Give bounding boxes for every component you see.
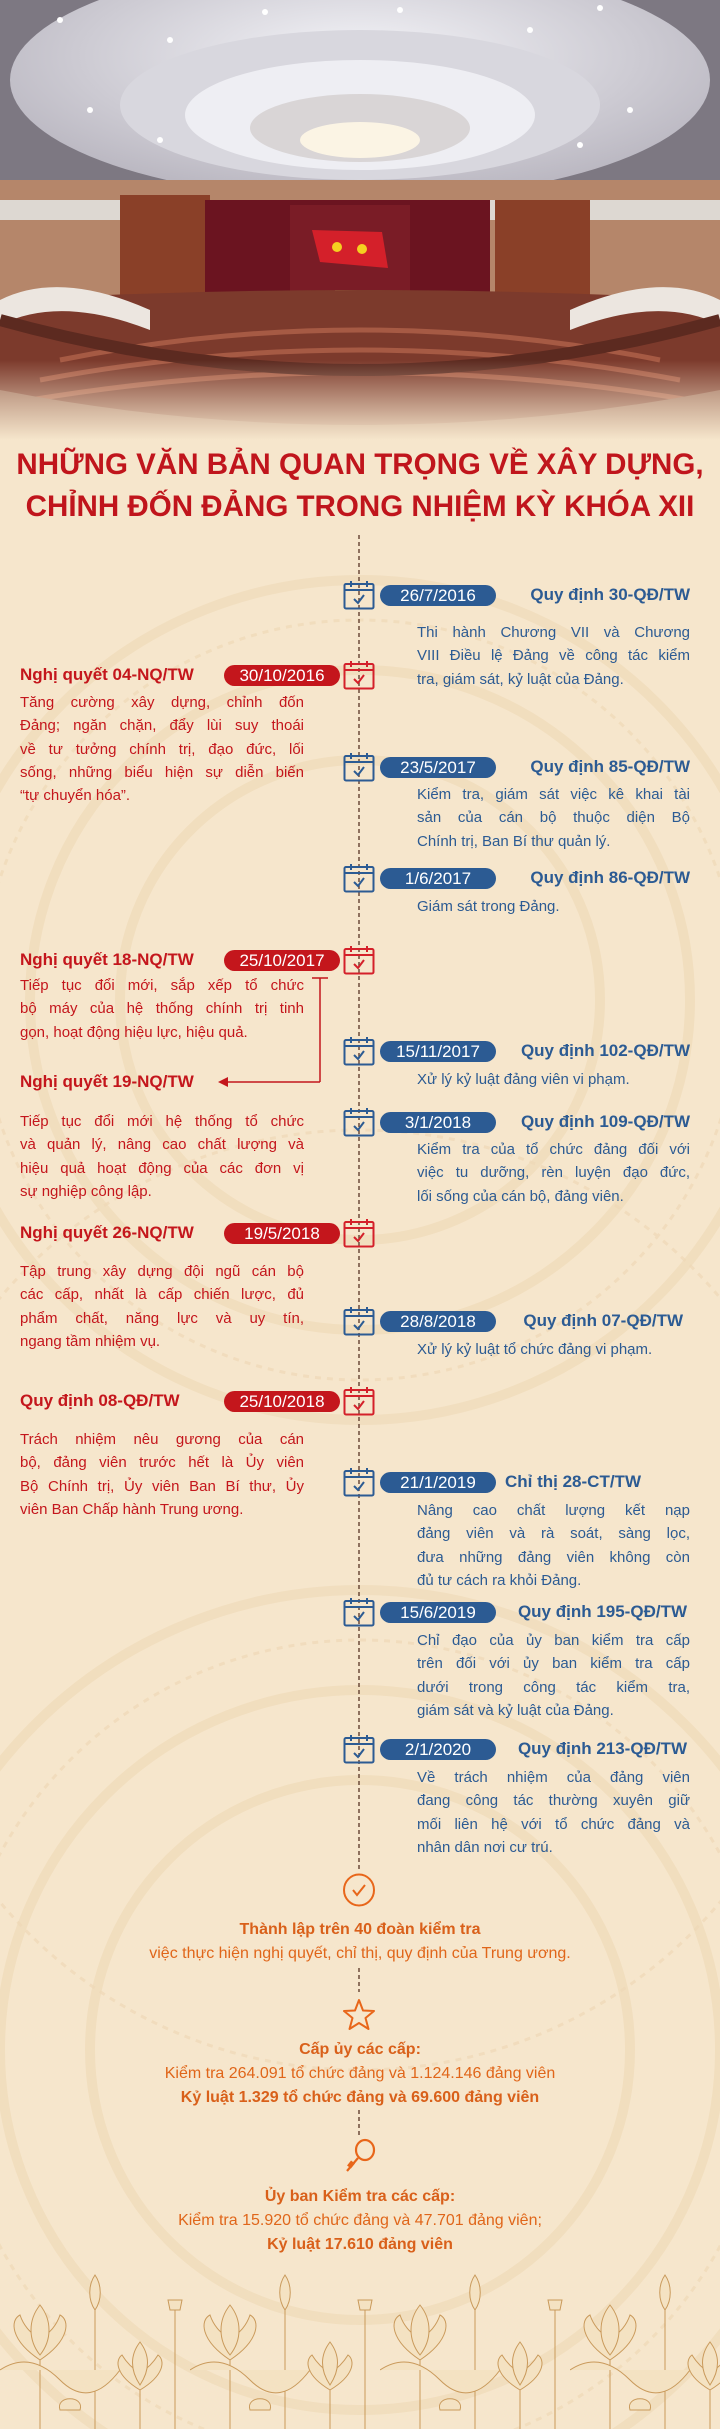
text block: bộ máy của hệ thống chính trị tinh xyxy=(20,1000,304,1017)
pill date xyxy=(380,1602,496,1623)
text block: Bộ Chính trị, Ủy viên Ban Bí thư, Ủy xyxy=(20,1478,304,1495)
callout: inspection teams: việc thực hiện nghị quyết, chỉ thị, quy định của Trung ương. xyxy=(149,1945,571,1962)
pill date red: 19/5/2018 xyxy=(244,1224,320,1243)
icon: calendar red xyxy=(344,946,374,974)
callout: inspection teams xyxy=(149,1921,571,1962)
text block: Tiếp tục đổi mới, sắp xếp tổ chức xyxy=(20,977,304,994)
pill date red: 30/10/2016 xyxy=(239,666,325,685)
text block xyxy=(417,1502,690,1589)
text block: NQ19: Tiếp tục đổi mới hệ thống tổ chức xyxy=(20,1113,304,1130)
text block: NQ19 xyxy=(20,1113,304,1200)
text block: Nâng cao chất lượng kết nạp xyxy=(417,1502,690,1519)
entry: Nghị quyết 26: Nghị quyết 26-NQ/TW xyxy=(20,1223,194,1242)
text block: việc tu dưỡng, rèn luyện đạo đức, xyxy=(417,1164,690,1181)
text block: Xử lý kỷ luật đảng viên vi phạm. xyxy=(417,1071,630,1088)
pill date red: 25/10/2018 xyxy=(239,1392,325,1411)
text block xyxy=(20,977,304,1041)
heading: Quy định 07-QĐ/TW xyxy=(523,1311,683,1330)
text block: về tư tưởng chính trị, đạo đức, lối xyxy=(20,741,304,758)
text block: đủ tư cách ra khỏi Đảng. xyxy=(417,1572,581,1589)
text block: các cấp, nhất là cấp chiến lược, đủ xyxy=(20,1286,304,1303)
pill date xyxy=(380,1112,496,1133)
pill date: 28/8/2018 xyxy=(400,1312,476,1331)
pill date: 21/1/2019 xyxy=(400,1473,476,1492)
arrow: bracket 18 to 19 xyxy=(218,977,328,1087)
heading: Quy định 195-QĐ/TW xyxy=(518,1602,687,1621)
pill date red xyxy=(224,950,340,971)
entry: Nghị quyết 18: Nghị quyết 18-NQ/TW xyxy=(20,950,194,969)
entry: 26/7/2016 Quy định 30 xyxy=(344,581,374,610)
pill date red: 25/10/2017 xyxy=(239,951,325,970)
callout: party committees: Kiểm tra 264.091 tổ chức đảng và 1.124.146 đảng viên xyxy=(165,2065,555,2082)
icon: calendar red xyxy=(344,1219,374,1248)
text block: sản của cán bộ thuộc diện Bộ xyxy=(417,809,690,826)
text block: NQ19: hiệu quả hoạt động của các đơn vị xyxy=(20,1160,304,1177)
pill date red xyxy=(224,665,340,686)
icon: calendar red xyxy=(344,1387,374,1416)
text block: đang công tác thường xuyên giữ xyxy=(417,1792,690,1809)
text block: NQ19: sự nghiệp công lập. xyxy=(20,1183,152,1200)
text block: Kiểm tra, giám sát việc kê khai tài xyxy=(417,786,690,803)
entry: 23/5/2017 xyxy=(344,753,374,782)
heading: Quy định 109-QĐ/TW xyxy=(521,1112,690,1131)
text block: Kiểm tra của tổ chức đảng đối với xyxy=(417,1141,690,1158)
text block: NQ19: và quản lý, nâng cao chất lượng và xyxy=(20,1136,304,1153)
text block: Tập trung xây dựng đội ngũ cán bộ xyxy=(20,1263,304,1280)
pill date xyxy=(380,1472,496,1493)
pill date xyxy=(380,757,496,778)
callout: party committees: Cấp ủy các cấp: xyxy=(299,2041,421,2058)
text block: lối sống của cán bộ, đảng viên. xyxy=(417,1188,624,1205)
entry: 15/6/2019 xyxy=(344,1598,374,1626)
entry: Quy định 08: Quy định 08-QĐ/TW xyxy=(20,1391,180,1410)
title: NHỮNG VĂN BẢN QUAN TRỌNG VỀ XÂY DỰNG, xyxy=(16,448,704,481)
icon: calendar red xyxy=(344,661,374,690)
text block xyxy=(20,1431,304,1518)
icon: calendar blue xyxy=(344,581,374,610)
callout: inspection commissions xyxy=(178,2186,542,2253)
entry: Nghị quyết 04: Nghị quyết 04-NQ/TW xyxy=(20,665,194,684)
text block: đưa những đảng viên không còn xyxy=(417,1549,690,1566)
pill date: 23/5/2017 xyxy=(400,758,476,777)
callout: inspection commissions: Ủy ban Kiểm tra các cấp: xyxy=(265,2188,455,2205)
icon: star xyxy=(343,1999,375,2030)
title xyxy=(16,447,704,523)
text block xyxy=(417,1769,690,1856)
text block xyxy=(20,1263,304,1350)
text block: Đảng; ngăn chặn, đẩy lùi suy thoái xyxy=(20,717,304,734)
icon: check circle xyxy=(343,1874,375,1906)
heading: Nghị quyết 19: Nghị quyết 19-NQ/TW xyxy=(20,1072,194,1091)
text block: VIII Điều lệ Đảng về công tác kiểm xyxy=(417,647,690,664)
text block: “tự chuyển hóa”. xyxy=(20,787,130,804)
text block xyxy=(20,694,304,804)
text block: Chính trị, Ban Bí thư quản lý. xyxy=(417,833,610,850)
text block: viên Ban Chấp hành Trung ương. xyxy=(20,1501,243,1518)
text block xyxy=(417,624,690,688)
title: CHỈNH ĐỐN ĐẢNG TRONG NHIỆM KỲ KHÓA XII xyxy=(26,490,694,523)
entry: 21/1/2019 xyxy=(344,1468,374,1496)
text block: tra, giám sát, kỷ luật của Đảng. xyxy=(417,671,624,688)
entry: 15/11/2017 xyxy=(344,1037,374,1066)
text block: đảng viên và rà soát, sàng lọc, xyxy=(417,1525,690,1542)
text block: mối liên hệ với tổ chức đảng và xyxy=(417,1816,690,1833)
pill date: 2/1/2020 xyxy=(405,1740,471,1759)
pill date red xyxy=(224,1391,340,1412)
entry: 3/1/2018 xyxy=(344,1108,374,1136)
pill date: 26/7/2016 xyxy=(400,586,476,605)
text block: Chỉ đạo của ủy ban kiểm tra cấp xyxy=(417,1632,690,1649)
entry: 1/6/2017 xyxy=(344,864,374,892)
pill date: 3/1/2018 xyxy=(405,1113,471,1132)
heading: Quy định 86-QĐ/TW xyxy=(530,868,690,887)
text block: sống, những biểu hiện sự diễn biến xyxy=(20,764,304,781)
pill date red xyxy=(224,1223,340,1244)
heading: Chỉ thị 28-CT/TW xyxy=(505,1472,641,1491)
text block xyxy=(417,1632,690,1719)
entry: 2/1/2020 xyxy=(344,1735,374,1764)
pill date: 15/6/2019 xyxy=(400,1603,476,1622)
decorative lotus border xyxy=(0,2274,720,2429)
text block: Thi hành Chương VII và Chương xyxy=(417,624,690,641)
pill date xyxy=(380,1311,496,1332)
text block: trên đối với ủy ban kiểm tra cấp xyxy=(417,1655,690,1672)
callout: party committees: Kỷ luật 1.329 tổ chức đảng và 69.600 đảng viên xyxy=(181,2089,539,2106)
text block: gọn, hoạt động hiệu lực, hiệu quả. xyxy=(20,1024,248,1041)
text block: Về trách nhiệm của đảng viên xyxy=(417,1769,690,1786)
text block: giám sát và kỷ luật của Đảng. xyxy=(417,1702,614,1719)
text block: Trách nhiệm nêu gương của cán xyxy=(20,1431,304,1448)
pill date xyxy=(380,585,496,606)
callout: inspection commissions: Kiểm tra 15.920 tổ chức đảng và 47.701 đảng viên; xyxy=(178,2212,542,2229)
heading: Quy định 85-QĐ/TW xyxy=(530,757,690,776)
heading: Quy định 213-QĐ/TW xyxy=(518,1739,687,1758)
pill date xyxy=(380,1739,496,1760)
entry: 28/8/2018 xyxy=(344,1307,374,1336)
header photo: party congress hall xyxy=(0,0,720,434)
text block xyxy=(417,786,690,850)
text block: Xử lý kỷ luật tổ chức đảng vi phạm. xyxy=(417,1341,652,1358)
text block: nhân dân nơi cư trú. xyxy=(417,1839,553,1856)
pill date: 1/6/2017 xyxy=(405,869,471,888)
text block: Giám sát trong Đảng. xyxy=(417,898,560,915)
pill date xyxy=(380,868,496,889)
callout: party committees xyxy=(165,2041,555,2106)
icon: magnifier xyxy=(346,2138,376,2172)
text block: bộ, đảng viên trước hết là Ủy viên xyxy=(20,1454,304,1471)
pill date xyxy=(380,1041,496,1062)
pill date: 15/11/2017 xyxy=(396,1042,480,1061)
heading: Quy định 30-QĐ/TW xyxy=(530,585,690,604)
text block: Tăng cường xây dựng, chỉnh đốn xyxy=(20,694,304,711)
text block: ngang tầm nhiệm vụ. xyxy=(20,1333,160,1350)
callout: inspection teams: Thành lập trên 40 đoàn kiểm tra xyxy=(240,1921,480,1938)
text block: dưới trong công tác kiểm tra, xyxy=(417,1679,690,1696)
text block: phẩm chất, năng lực và uy tín, xyxy=(20,1310,304,1327)
callout: inspection commissions: Kỷ luật 17.610 đảng viên xyxy=(267,2236,453,2253)
text block xyxy=(417,1141,690,1205)
heading: Quy định 102-QĐ/TW xyxy=(521,1041,690,1060)
